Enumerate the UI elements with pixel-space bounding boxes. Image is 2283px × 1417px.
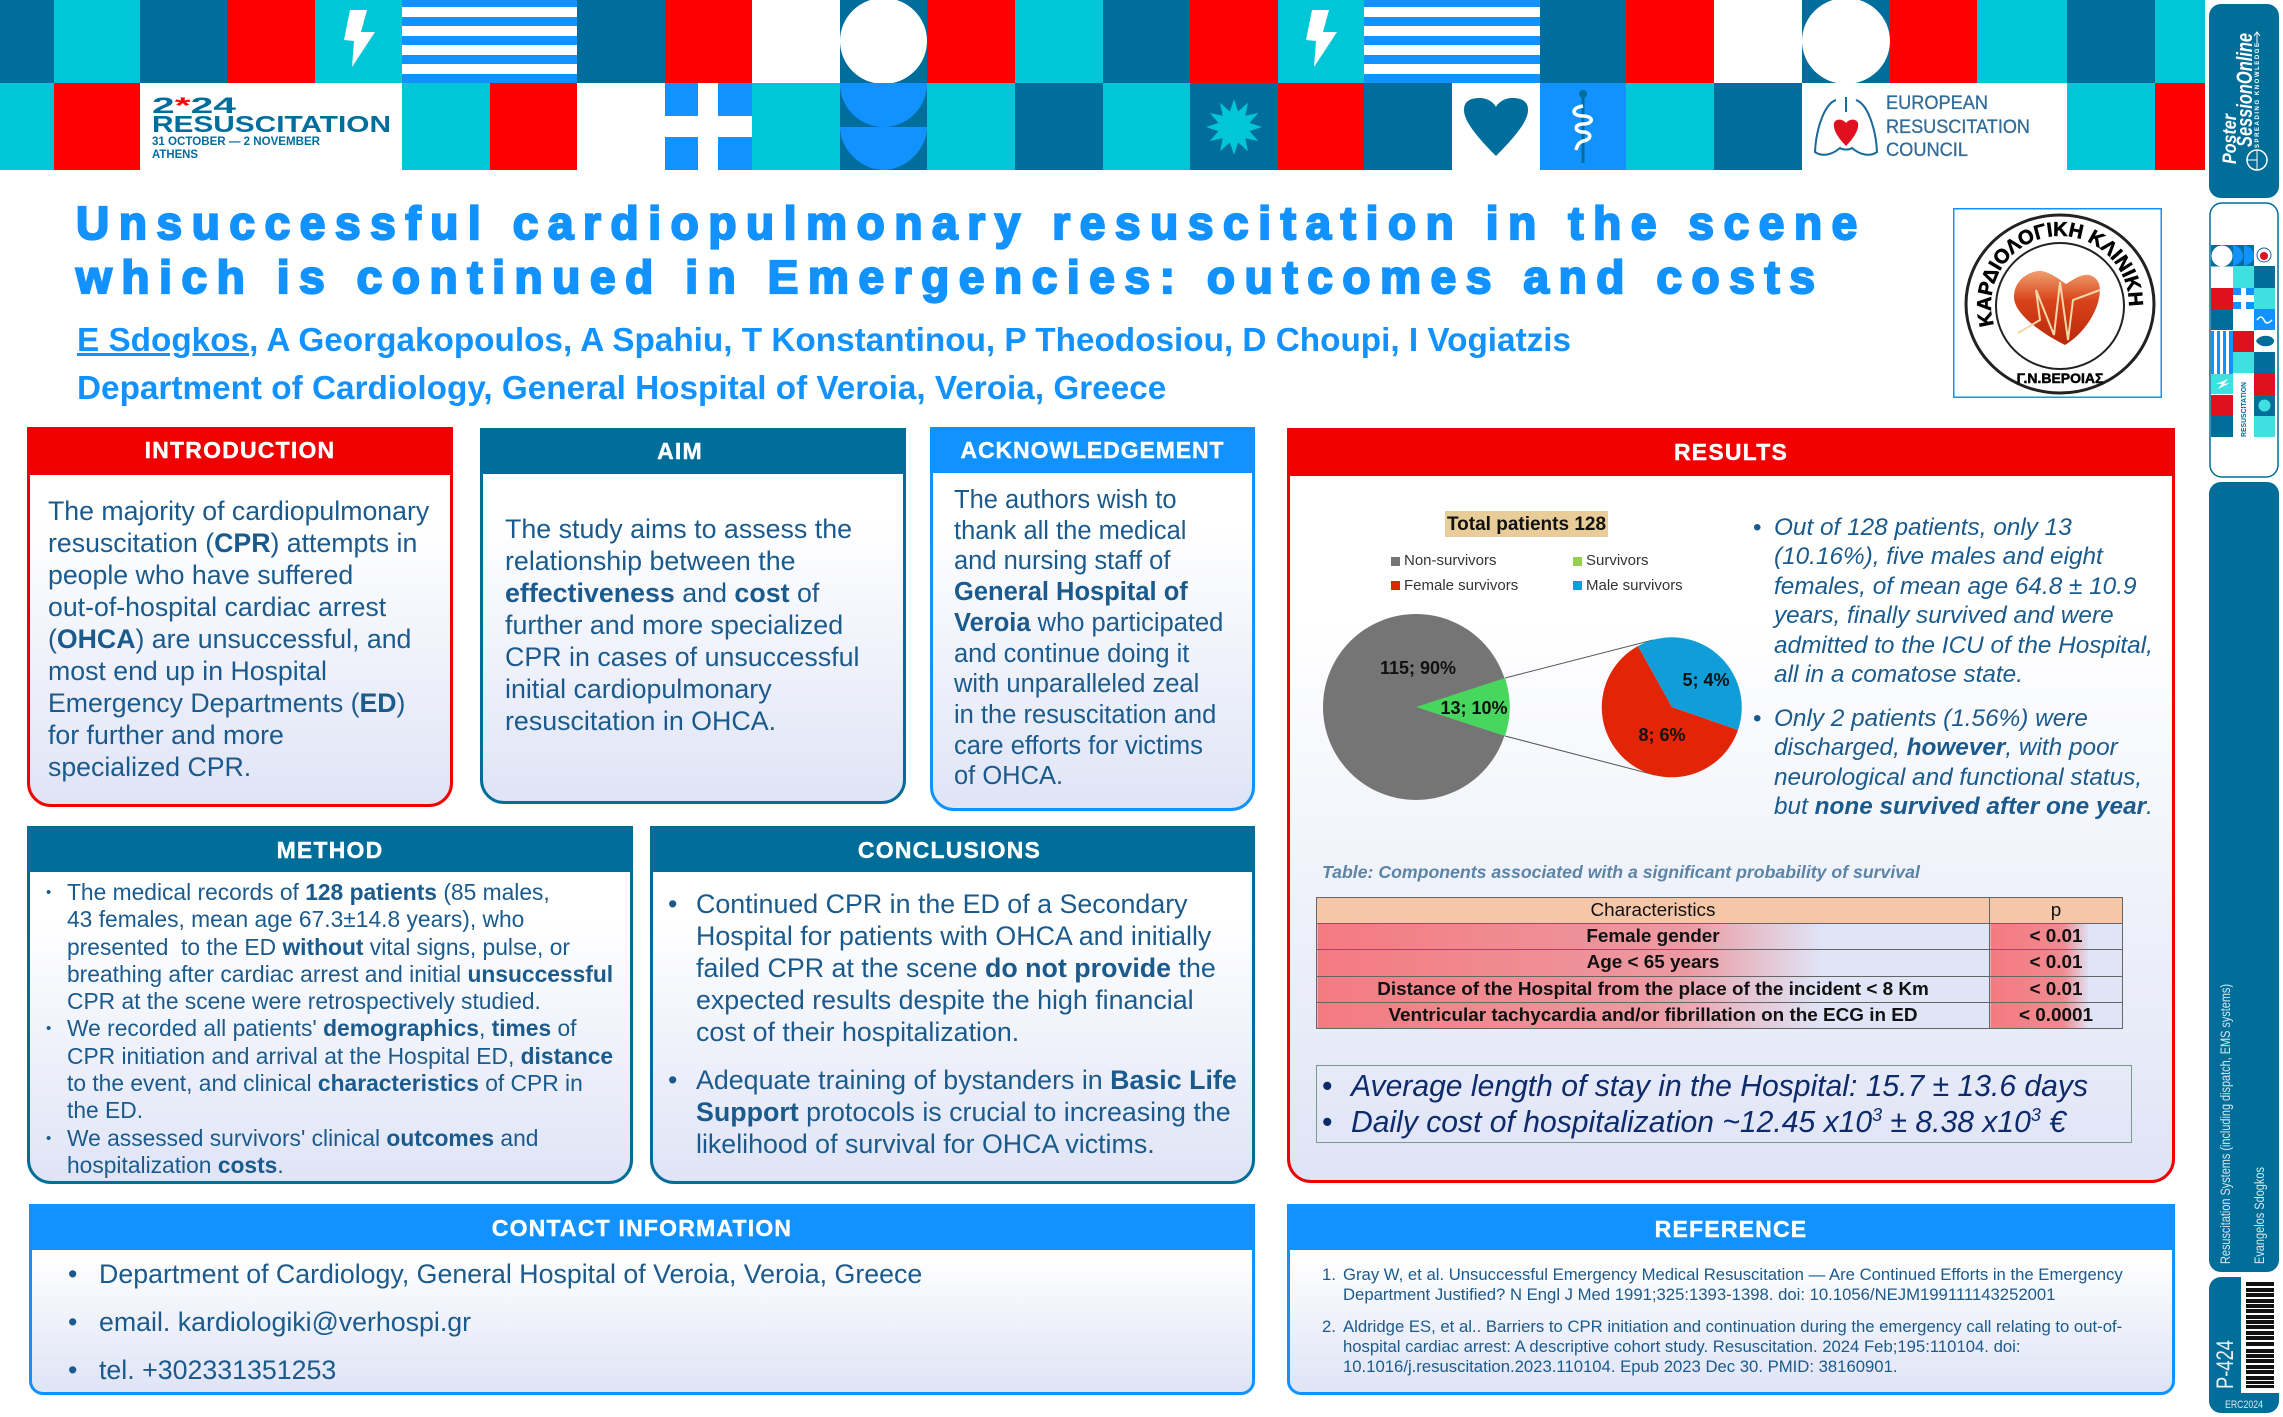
icon: rod of asclepius <box>1540 83 1626 170</box>
text: reference one: Gray W, et al. Unsuccessful Emergency Medical Resuscitation — Are Continued Efforts in the Emergency <box>1343 1265 2123 1284</box>
callout: stay and cost <box>1316 1065 2132 1143</box>
cardiology clinic logo <box>1953 208 2162 398</box>
panel: method <box>27 826 633 1184</box>
right sidebar <box>2209 4 2279 1413</box>
cardiology clinic logo: Γ.Ν.ΒΕΡΟΙΑΣ <box>2017 370 2103 386</box>
text: method body: We recorded all patients' demographics, times of <box>67 1015 577 1041</box>
text: method body: The medical records of 128 patients (85 males, <box>67 879 550 905</box>
panel: introduction <box>27 427 453 807</box>
table: < 0.0001 <box>2019 1005 2093 1026</box>
heading: introduction: INTRODUCTION <box>145 437 335 463</box>
text: introduction body <box>48 496 430 782</box>
panel: reference: 1. <box>1322 1265 1336 1284</box>
title <box>74 197 1867 304</box>
european resuscitation council logo: EUROPEAN <box>1886 93 1988 114</box>
chart legend: Male survivors <box>1586 577 1683 594</box>
text: reference one <box>1322 1265 2123 1304</box>
panel: method: • <box>46 1020 51 1037</box>
text: acknowledgement body: and continue doing it <box>954 640 1189 668</box>
text: introduction body: specialized CPR. <box>48 752 251 782</box>
resuscitation 2024 logo: RESUSCITATION <box>152 111 391 137</box>
text: acknowledgement body: Veroia who participated <box>954 609 1223 637</box>
text: results bullet one: all in a comatose state. <box>1774 661 2023 688</box>
poster session online badge: Poster <box>2220 113 2241 164</box>
pie value labels <box>1380 658 1730 745</box>
poster number and barcode <box>2209 1277 2279 1413</box>
text: aim body: CPR in cases of unsuccessful <box>505 642 859 672</box>
text: contact details: tel. +302331351253 <box>99 1355 336 1385</box>
pie value labels: 13; 10% <box>1440 698 1508 718</box>
panel: reference: 2. <box>1322 1317 1336 1336</box>
pie value labels: 5; 4% <box>1682 670 1730 690</box>
icon: greek stripes <box>402 0 1540 83</box>
table <box>1316 897 2123 1029</box>
heading: introduction <box>27 427 453 475</box>
text: introduction body: (OHCA) are unsuccessful, and <box>48 624 411 654</box>
table: p <box>2051 900 2061 921</box>
text: introduction body: The majority of cardiopulmonary <box>48 496 429 526</box>
table: < 0.01 <box>2029 979 2083 1000</box>
icon: blue half circles <box>840 83 927 170</box>
heading: method: METHOD <box>277 837 383 863</box>
text: method body: hospitalization costs. <box>67 1152 284 1178</box>
callout: stay and cost: Daily cost of hospitalization ~12.45 x103 ± 8.38 x103 € <box>1351 1105 2066 1139</box>
poster session online badge <box>2209 4 2279 198</box>
text: results bullet one: Out of 128 patients, only 13 <box>1774 514 2072 541</box>
text: method body: presented to the ED without vital signs, pulse, or <box>67 934 570 960</box>
heading: results: RESULTS <box>1674 439 1788 465</box>
text: method body: breathing after cardiac arrest and initial unsuccessful <box>67 961 613 987</box>
text: introduction body: most end up in Hospital <box>48 656 327 686</box>
heading: aim <box>480 428 906 474</box>
text: reference two <box>1322 1317 2122 1376</box>
panel: contact information: • <box>68 1259 77 1289</box>
text: method body: We assessed survivors' clinical outcomes and <box>67 1125 538 1151</box>
text: results bullet one <box>1753 514 2153 688</box>
chart legend: Non-survivors <box>1404 552 1497 569</box>
heading: acknowledgement: ACKNOWLEDGEMENT <box>961 437 1224 463</box>
text: acknowledgement body: General Hospital of <box>954 578 1188 606</box>
text: aim body <box>505 514 859 736</box>
text: acknowledgement body: thank all the medical <box>954 517 1186 545</box>
european resuscitation council logo: RESUSCITATION <box>1886 117 2030 138</box>
resuscitation 2024 logo: 2 * 24 <box>152 93 237 118</box>
panel: conclusions: • <box>668 1065 677 1095</box>
text: results bullet two: Only 2 patients (1.56%) were <box>1774 705 2088 732</box>
european resuscitation council logo <box>1802 83 2067 170</box>
text: introduction body: people who have suffered <box>48 560 353 590</box>
text: reference two: hospital cardiac arrest: A descriptive cohort study. Resuscitation. 2024 Feb;195:110104. doi: <box>1343 1337 2020 1356</box>
text: reference two: Aldridge ES, et al.. Barriers to CPR initiation and continuation during the emergency call relating to out-of- <box>1343 1317 2122 1336</box>
title: which is continued in Emergencies: outcomes and costs <box>76 251 1825 303</box>
resuscitation 2024 logo: 31 OCTOBER — 2 NOVEMBER <box>152 134 320 148</box>
heading: aim: AIM <box>657 438 703 464</box>
panel: conclusions: • <box>668 889 677 919</box>
text: introduction body: resuscitation (CPR) attempts in <box>48 528 417 558</box>
text: aim body: The study aims to assess the <box>505 514 852 544</box>
resuscitation 2024 logo: ATHENS <box>152 147 198 161</box>
text: reference two: 10.1016/j.resuscitation.2023.110104. Epub 2023 Dec 30. PMID: 38160901. <box>1343 1357 1897 1376</box>
text: conclusion two <box>668 1065 1237 1159</box>
text: conclusion one <box>668 889 1216 1047</box>
affiliation: Department of Cardiology, General Hospital of Veroia, Veroia, Greece <box>77 370 1166 407</box>
text: acknowledgement body: care efforts for victims <box>954 732 1203 760</box>
text: conclusion one: cost of their hospitalization. <box>696 1017 1019 1047</box>
text: conclusion one: expected results despite the high financial <box>696 985 1194 1015</box>
chart title: Total patients 128 <box>1447 514 1606 535</box>
cardiology clinic logo: ΚΑΡΔΙΟΛΟΓΙΚΗ ΚΛΙΝΙΚΗ <box>1976 222 2144 327</box>
panel: results <box>1287 428 2175 1183</box>
text: conclusion one: Hospital for patients with OHCA and initially <box>696 921 1211 951</box>
icon: heart <box>1452 83 1540 170</box>
text: method body: CPR initiation and arrival at the Hospital ED, distance <box>67 1043 613 1069</box>
session topic strip: Evangelos Sdogkos <box>2251 1167 2267 1264</box>
heading: method <box>27 826 633 872</box>
text: aim body: effectiveness and cost of <box>505 578 819 608</box>
text: introduction body: for further and more <box>48 720 284 750</box>
callout: stay and cost: Average length of stay in the Hospital: 15.7 ± 13.6 days <box>1351 1070 2088 1103</box>
session topic strip <box>2209 482 2279 1272</box>
table: Age < 65 years <box>1587 952 1719 973</box>
text: acknowledgement body: The authors wish to <box>954 486 1177 514</box>
text: results bullet two: discharged, however, with poor <box>1774 734 2118 761</box>
heading: reference <box>1287 1204 2175 1250</box>
text: conclusion two: Support protocols is crucial to increasing the <box>696 1097 1231 1127</box>
text: aim body: resuscitation in OHCA. <box>505 706 776 736</box>
heading: contact information: CONTACT INFORMATION <box>492 1215 792 1241</box>
text: introduction body: out-of-hospital cardiac arrest <box>48 592 386 622</box>
panel: results: • <box>1753 514 1762 541</box>
panel: method: • <box>46 1130 51 1147</box>
table caption: Table: Components associated with a significant probability of survival <box>1322 862 1920 882</box>
text: acknowledgement body: with unparalleled zeal <box>954 670 1199 698</box>
table: Characteristics <box>1591 900 1715 921</box>
text: conclusion two: likelihood of survival for OHCA victims. <box>696 1129 1155 1159</box>
icon: white circles <box>840 0 1890 84</box>
panel: results: • <box>1753 705 1762 732</box>
mini poster thumbnail <box>2210 203 2278 477</box>
text: results bullet two <box>1753 705 2153 820</box>
text: contact details: email. kardiologiki@verhospi.gr <box>99 1307 471 1337</box>
text: method body <box>46 879 613 1178</box>
heading: results <box>1287 428 2175 476</box>
panel: contact information <box>29 1204 1255 1395</box>
title: Unsuccessful cardiopulmonary resuscitation in the scene <box>76 197 1867 249</box>
table: Distance of the Hospital from the place of the incident < 8 Km <box>1377 979 1929 1000</box>
text: conclusion one: failed CPR at the scene do not provide the <box>696 953 1216 983</box>
text: results bullet one: admitted to the ICU of the Hospital, <box>1774 632 2153 659</box>
resuscitation 2024 logo <box>140 83 402 170</box>
chart legend: Survivors <box>1586 552 1649 569</box>
icon: lightning bolts <box>344 10 1337 67</box>
text: method body: CPR at the scene were retrospectively studied. <box>67 988 541 1014</box>
heading: reference: REFERENCE <box>1655 1216 1807 1242</box>
table: Female gender <box>1586 926 1720 947</box>
text: acknowledgement body <box>954 486 1223 790</box>
text: aim body: relationship between the <box>505 546 796 576</box>
text: acknowledgement body: and nursing staff of <box>954 547 1170 575</box>
table: Ventricular tachycardia and/or fibrillation on the ECG in ED <box>1388 1005 1918 1026</box>
text: conclusion two: Adequate training of bystanders in Basic Life <box>696 1065 1237 1095</box>
text: method body: 43 females, mean age 67.3±14.8 years), who <box>67 906 524 932</box>
table: < 0.01 <box>2029 926 2083 947</box>
pie value labels: 8; 6% <box>1638 725 1686 745</box>
poster number and barcode: P-424 <box>2212 1340 2239 1389</box>
panel: method: • <box>46 884 51 901</box>
panel: conclusions <box>650 826 1255 1184</box>
text: contact details: Department of Cardiology, General Hospital of Veroia, Veroia, Greece <box>99 1259 922 1289</box>
pie chart <box>1323 511 1742 800</box>
text: aim body: further and more specialized <box>505 610 843 640</box>
heading: contact information <box>29 1204 1255 1250</box>
authors: E Sdogkos, A Georgakopoulos, A Spahiu, T Konstantinou, P Theodosiou, D Choupi, I Vogiatzis <box>77 322 1571 359</box>
breakdown pie <box>1602 637 1742 777</box>
text: introduction body: Emergency Departments (ED) <box>48 688 405 718</box>
mini poster thumbnail: RESUSCITATION <box>2241 382 2248 437</box>
table: < 0.01 <box>2029 952 2083 973</box>
text: conclusion one: Continued CPR in the ED of a Secondary <box>696 889 1188 919</box>
panel: contact information: • <box>68 1307 77 1337</box>
callout: stay and cost: • <box>1322 1070 1333 1103</box>
text: reference one: Department Justified? N Engl J Med 1991;325:1393-1398. doi: 10.1056/NEJM199111143252001 <box>1343 1285 2056 1304</box>
icon: greek cross <box>665 83 752 170</box>
heading: acknowledgement <box>930 427 1255 473</box>
european resuscitation council logo: COUNCIL <box>1886 140 1968 161</box>
text: method body: the ED. <box>67 1097 143 1123</box>
panel: reference <box>1287 1204 2175 1395</box>
callout: stay and cost: • <box>1322 1106 1333 1139</box>
panel: contact information: • <box>68 1355 77 1385</box>
text: results bullet two: neurological and functional status, <box>1774 764 2142 791</box>
icon: star <box>1206 99 1262 155</box>
session topic strip: Resuscitation Systems (including dispatch, EMS systems) <box>2217 984 2233 1264</box>
chart legend: Female survivors <box>1404 577 1518 594</box>
panel: aim <box>480 428 906 804</box>
pie value labels: 115; 90% <box>1380 658 1456 678</box>
text: contact details <box>68 1259 922 1385</box>
main pie <box>1323 614 1510 800</box>
text: acknowledgement body: of OHCA. <box>954 762 1063 790</box>
text: aim body: initial cardiopulmonary <box>505 674 772 704</box>
connector lines <box>1505 640 1655 775</box>
text: method body: to the event, and clinical characteristics of CPR in <box>67 1070 583 1096</box>
text: results bullet one: (10.16%), five males and eight <box>1774 543 2103 570</box>
text: results bullet one: years, finally survived and were <box>1774 602 2114 629</box>
text: acknowledgement body: in the resuscitation and <box>954 701 1216 729</box>
text: results bullet one: females, of mean age 64.8 ± 10.9 <box>1774 573 2137 600</box>
poster session online badge: SPREADING KNOWLEDGE <box>2255 43 2261 148</box>
chart legend <box>1391 552 1683 594</box>
header banner with tiles <box>0 0 2205 170</box>
text: results bullet two: but none survived after one year. <box>1774 793 2153 820</box>
poster number and barcode: ERC2024 <box>2225 1399 2263 1411</box>
panel: acknowledgement <box>930 427 1255 811</box>
heading: conclusions <box>650 826 1255 872</box>
heading: conclusions: CONCLUSIONS <box>858 837 1041 863</box>
